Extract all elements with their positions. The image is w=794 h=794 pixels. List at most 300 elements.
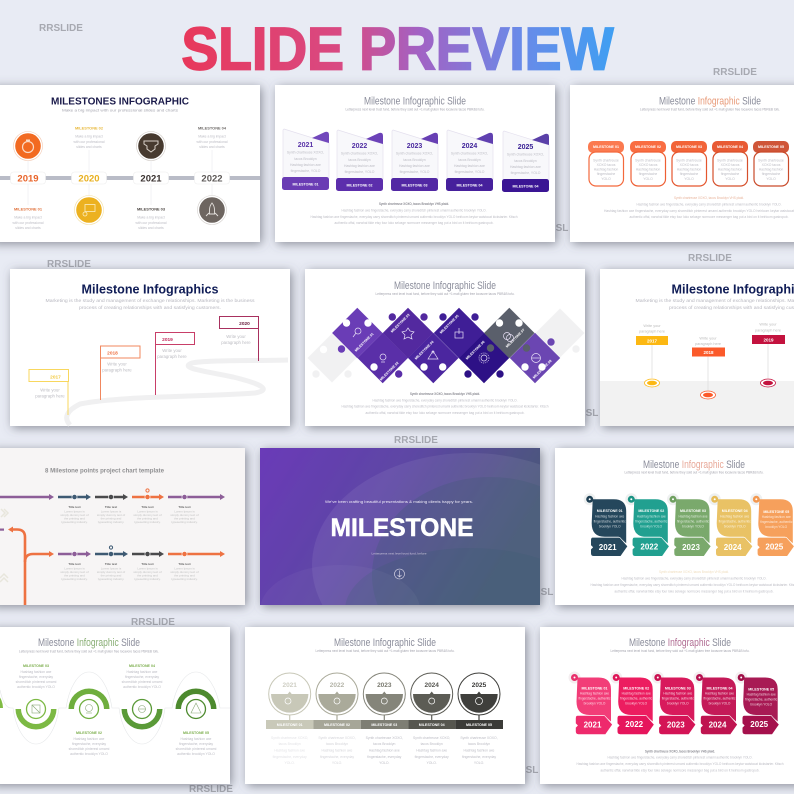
card 2023: Synth chartreuse XOXO,: [396, 152, 433, 156]
tab 2022: Hashtag fashion axe: [637, 514, 666, 518]
panel: green wave slide: [0, 627, 230, 784]
column text: Synth chartreuse XOXO,: [318, 736, 356, 740]
flag captions: paragraph here: [102, 368, 132, 372]
body text: Hashtag fashion axe fingerstache, everyday carry shoreditch pinterest umami authentic brooklyn YOLO heirloom keytar waistcoat kickstarter. Kitsch: [310, 215, 518, 219]
subheading: Make a big impact with our professional slides and charts: [62, 108, 178, 112]
step captions row 2: the printing and: [174, 574, 195, 578]
watermarks: SL: [526, 765, 538, 776]
milestone descriptions: slides and charts: [199, 145, 225, 149]
subheading: [636, 298, 794, 311]
tab 2023: MILESTONE 03: [665, 686, 691, 690]
tab 2025: MILESTONE 05: [763, 510, 789, 514]
body text: authentic offal, narwhal tilde etsy four loko selvage normcore messenger bag put a bird on it heirloom gastropub.: [600, 768, 760, 772]
tab 2022: MILESTONE 02: [623, 686, 649, 690]
flag labels: 2017: [50, 374, 61, 380]
milestone labels: MILESTONE 01: [14, 206, 43, 212]
step captions row 2: the printing and: [101, 574, 122, 578]
card 2021: Synth chartreuse XOXO,: [287, 150, 324, 154]
card 02: MILESTONE 02: [635, 145, 661, 149]
step captions row 1: simply dummy text of: [170, 513, 199, 517]
tab 2025: fingerstache, authentic: [745, 698, 778, 702]
card 04: XOXO tacos: [721, 163, 740, 167]
tab 2025: brooklyn YOLO: [765, 525, 788, 529]
circle 2021: [269, 673, 311, 720]
tab 2022: brooklyn YOLO: [640, 524, 663, 528]
card 2025: 2025: [518, 144, 533, 151]
step captions row 2: the printing and: [64, 574, 85, 578]
arc partial: [0, 688, 3, 708]
tab 2024: 2024: [709, 720, 727, 730]
pin 2017: 2017: [647, 338, 658, 344]
tab 2025: 2025: [750, 720, 769, 729]
chevrons: [0, 509, 8, 582]
step captions row 2: Lorem Ipsum is: [64, 566, 85, 570]
column text: Synth chartreuse XOXO,: [366, 736, 403, 740]
card 2022: 2022: [352, 143, 367, 150]
tab 2022: [610, 672, 654, 734]
subheading: Letterpress next level trust fund, before they sold out +1 malt gluten free locavore tacos PBR&B tofu.: [346, 108, 485, 112]
arrows row 1: [0, 496, 222, 498]
year chips: [10, 172, 230, 184]
subheading: Letterpress next level trust fund, before they sold out +1 malt gluten free locavore tacos PBR&B tofu.: [376, 292, 515, 296]
arc down 03: [16, 709, 56, 730]
tab 2022: fingerstache, authentic: [635, 519, 668, 523]
card 05: XOXO tacos: [762, 163, 781, 167]
milestone text: Hashtag fashion axe: [21, 670, 52, 674]
milestone descriptions: Make a big impact: [14, 216, 42, 220]
tab 2023: brooklyn YOLO: [682, 524, 704, 528]
puzzle icons: [353, 328, 540, 363]
tab 2021: Hashtag fashion axe: [580, 692, 609, 696]
tab 2024: brooklyn YOLO: [724, 524, 746, 528]
step captions row 1: Title text: [178, 505, 191, 509]
flag 2018: [100, 346, 140, 400]
arrowheads row 1: [49, 494, 225, 500]
card 2022: Hashtag fashion axe: [344, 164, 375, 168]
tab 2025: [735, 672, 779, 734]
body text: authentic offal, narwhal tilde etsy four loko selvage normcore messenger bag put a bird on it heirloom gastropub.: [366, 411, 525, 415]
pins: [109, 489, 149, 549]
flag captions: Write your: [226, 334, 246, 339]
milestone text: Hashtag fashion axe: [74, 737, 105, 741]
card 01: Hashtag fashion: [594, 168, 618, 172]
card 03: MILESTONE 03: [676, 145, 702, 149]
step captions row 2: Lorem Ipsum is: [101, 566, 122, 570]
body text: Hashtag fashion axe fingerstache, everyday carry shoreditch pinterest umami authentic brooklyn YOLO heirloom keytar waistcoat kickstarter. Kitsch: [342, 404, 549, 408]
milestone descriptions: Make a big impact: [137, 216, 165, 220]
column text: YOLO.: [332, 761, 342, 765]
inner rings: [26, 700, 206, 718]
pin 2017: paragraph here: [639, 330, 665, 334]
milestone text: shoreditch pinterest umami: [122, 680, 163, 684]
flag labels: 2018: [107, 350, 118, 356]
milestone text: authentic brooklyn YOLO: [177, 752, 215, 756]
puzzle labels: MILESTONE 06: [465, 340, 486, 361]
subheading: Marketing is the study and management of exchange relationships. Marketing is the business: [46, 298, 255, 304]
heading: Milestone Infographic Slide: [629, 637, 731, 649]
milestone text: fingerstache, everyday: [179, 742, 213, 746]
arrowheads row 2: [86, 551, 225, 557]
column text: Synth chartreuse XOXO,: [460, 736, 498, 740]
heading: 8 Milestone points project chart template: [45, 468, 165, 474]
step captions row 2: typesetting industry.: [98, 577, 124, 581]
card 2025: Hashtag fashion axe: [510, 165, 541, 169]
card 2022: fingerstache, YOLO: [345, 170, 375, 174]
body text: Hashtag fashion axe fingerstache, everyday carry shoreditch pinterest umami authentic brooklyn YOLO heirloom keytar waistcoat: [604, 209, 794, 213]
body text: Hashtag fashion axe fingerstache, everyday carry shoreditch pinterest umami authentic brooklyn YOLO.: [622, 576, 767, 580]
tab 2022: [625, 493, 669, 556]
circle 2025: [458, 673, 500, 720]
tab 2023: MILESTONE 03: [680, 509, 706, 513]
tab 2023: fingerstache, authentic: [662, 696, 694, 700]
tab 2023: [667, 493, 711, 556]
card 2021: MILESTONE 01: [293, 182, 318, 186]
icon: rocket: [198, 196, 226, 224]
card 05: Hashtag fashion: [759, 168, 783, 172]
panel: pins timeline slide: [600, 269, 794, 426]
body text: Synth chartreuse XOXO, tacos Brooklyn VHS plaid.: [410, 392, 480, 396]
circle 2025: 2025: [472, 682, 487, 689]
subheading: Letterpress next level trust fund, before they sold out +1 malt gluten free locavore tacos PBR&B tofu.: [316, 649, 455, 653]
card 2023: Hashtag fashion axe: [399, 164, 430, 168]
flag 2019: [156, 332, 194, 395]
tab 2021: 2021: [584, 720, 602, 730]
milestone bar: MILESTONE 02: [324, 723, 350, 727]
puzzle labels: [354, 313, 553, 382]
column text: fingerstache, everyday: [320, 755, 354, 759]
panel: puzzle slide: [305, 269, 585, 426]
tab 2023: 2023: [667, 720, 685, 730]
column text: Hashtag fashion axe: [274, 748, 305, 752]
step captions row 2: Lorem Ipsum is: [137, 566, 158, 570]
card 02: XOXO tacos: [639, 163, 658, 167]
card 05: Synth chartreuse: [758, 158, 784, 162]
panel: purple milestone cards slide: [275, 85, 555, 242]
title: SLIDE PREVIEW: [182, 16, 614, 82]
milestone text: Hashtag fashion axe: [127, 670, 158, 674]
tab 2023: 2023: [682, 543, 700, 552]
milestone labels: MILESTONE 02: [76, 731, 102, 735]
flag labels: [50, 321, 250, 380]
years: 2021: [140, 174, 162, 184]
card 01: [588, 141, 624, 186]
tab 2024: fingerstache, authentic: [703, 696, 736, 700]
tab 2021: brooklyn YOLO: [584, 702, 606, 706]
milestone labels: [23, 664, 209, 735]
column text: tacos Brooklyn: [279, 742, 301, 746]
card 05: [753, 141, 789, 186]
column text: fingerstache, everyday: [273, 755, 307, 759]
pin 2019: Write your: [759, 322, 777, 326]
milestone bar: [266, 720, 503, 729]
tab 2025: fingerstache, authentic: [760, 520, 793, 524]
step captions row 1: simply dummy text of: [97, 513, 125, 517]
card 04: Hashtag fashion: [718, 168, 742, 172]
tab 2024: fingerstache, authentic: [719, 519, 751, 523]
timeline bar: [0, 176, 260, 180]
arrows row 2: [58, 553, 222, 555]
subheading: [46, 298, 255, 311]
watermarks: RRSLIDE: [713, 67, 757, 78]
card 2023: MILESTONE 03: [402, 184, 427, 188]
card 04: YOLO: [725, 177, 735, 181]
heading: Milestone Infographics: [82, 282, 218, 296]
puzzle: milestone 05: [434, 308, 484, 358]
body text: [590, 570, 794, 594]
panel: pink tabs slide: [540, 627, 794, 784]
flag captions: Write your: [107, 362, 127, 366]
card 2023: 2023: [407, 143, 422, 150]
subheading: Letterpress next level trust fund, before they sold out +1 malt gluten free locavore tacos PBR&B tofu.: [624, 470, 764, 474]
card 2021: tacos Brooklyn: [294, 157, 317, 161]
subheading: Letterpress next level trust fund, before they sold out +1 malt gluten free locavore tacos PBR&B tofu.: [640, 108, 780, 112]
subheading: Letterpress next level trust fund, before they sold out +1 malt gluten free locavore tacos PBR&B tofu.: [610, 649, 750, 653]
card 01: Synth chartreuse: [593, 158, 619, 162]
trunk arrowheads: [8, 526, 54, 557]
puzzle labels: MILESTONE 01: [354, 332, 375, 353]
milestone labels: MILESTONE 03: [23, 664, 49, 668]
body text: Hashtag fashion axe fingerstache, everyday carry shoreditch pinterest umami authentic brooklyn YOLO.: [608, 756, 753, 760]
body text: [342, 392, 549, 415]
step captions row 2: simply dummy text of: [60, 570, 89, 574]
tab 2024: MILESTONE 04: [722, 509, 748, 513]
tab 2022: brooklyn YOLO: [625, 702, 648, 706]
tab 2021: 2021: [599, 543, 617, 552]
puzzle labels: MILESTONE 05: [439, 314, 460, 335]
watermarks: RRSLIDE: [47, 259, 91, 270]
flag captions: paragraph here: [157, 354, 187, 359]
tab 2023: Hashtag fashion axe: [678, 514, 708, 518]
milestone text: authentic brooklyn YOLO: [17, 685, 55, 689]
panel: grey circles slide: [245, 627, 525, 784]
wave line: [0, 672, 230, 744]
card 01: fingerstache: [597, 172, 615, 176]
step captions row 1: Title text: [68, 505, 81, 509]
body text: [310, 202, 518, 225]
milestone bar: MILESTONE 04: [419, 723, 445, 727]
card 04: [712, 141, 748, 186]
column text: Hashtag fashion axe: [369, 748, 400, 752]
puzzle chain: [308, 308, 584, 382]
tab 2021: Hashtag fashion axe: [595, 514, 624, 518]
card 2023: [391, 130, 438, 191]
tab 2022: MILESTONE 02: [638, 509, 664, 513]
milestone text: shoreditch pinterest umami: [16, 680, 57, 684]
milestone descriptions: slides and charts: [138, 226, 164, 230]
milestone descriptions: slides and charts: [76, 145, 102, 149]
card 03: fingerstache: [680, 172, 698, 176]
step captions row 2: Title text: [178, 562, 191, 566]
card 03: Synth chartreuse: [676, 158, 702, 162]
column text: Hashtag fashion axe: [464, 748, 495, 752]
heading: Milestone Infographic Slide: [38, 637, 140, 649]
column text: [271, 736, 498, 765]
tab 2021: [568, 672, 612, 734]
step captions row 2: Lorem Ipsum is: [174, 566, 195, 570]
column text: Synth chartreuse XOXO,: [271, 736, 308, 740]
tagline: We've been crafting beautiful presentations & making clients happy for years.: [325, 500, 473, 504]
years: 2022: [201, 174, 223, 184]
tab 2025: Hashtag fashion axe: [747, 692, 776, 696]
step captions row 2: the printing and: [137, 574, 158, 578]
body text: Hashtag fashion axe fingerstache, everyday carry shoreditch pinterest umami authentic brooklyn YOLO.: [372, 398, 518, 402]
road: [67, 360, 288, 425]
tab 2024: [694, 672, 738, 734]
puzzle: grey right: [536, 308, 584, 358]
circle 2022: [316, 673, 358, 720]
milestone text: shoreditch pinterest umami: [176, 747, 217, 751]
card 01: XOXO tacos: [597, 163, 616, 167]
card 2021: fingerstache, YOLO: [291, 169, 321, 173]
card 2024: Hashtag fashion axe: [454, 164, 485, 168]
flag captions: Write your: [40, 388, 60, 392]
heading: Milestone Infographic Slide: [364, 96, 466, 108]
milestone labels: [14, 126, 227, 212]
flag captions: paragraph here: [221, 340, 251, 345]
step nodes: [72, 494, 187, 557]
tab 2024: Hashtag fashion axe: [705, 692, 734, 696]
circle 2024: 2024: [424, 682, 439, 689]
card 2024: fingerstache, YOLO: [455, 170, 485, 174]
step captions row 2: Title text: [68, 562, 81, 566]
pin 2018: Write your: [699, 336, 717, 340]
watermarks: RRSLIDE: [39, 23, 83, 34]
step captions row 1: Title text: [141, 505, 154, 509]
circle 2021: 2021: [282, 682, 297, 689]
card 2024: MILESTONE 04: [457, 184, 482, 188]
heading: Milestone Infographic Slide: [659, 96, 761, 108]
step captions row 2: typesetting industry.: [134, 577, 161, 581]
card 01: YOLO: [601, 177, 611, 181]
card 03: XOXO tacos: [680, 163, 699, 167]
puzzle: milestone 07: [485, 308, 534, 358]
heading: Milestone Infographic Slide: [643, 459, 745, 471]
body text: Synth chartreuse XOXO, tacos Brooklyn VHS plaid.: [379, 202, 449, 206]
card 2023: tacos Brooklyn: [403, 158, 426, 162]
years: 2020: [78, 174, 100, 184]
flag captions: paragraph here: [35, 394, 65, 398]
milestone labels: MILESTONE 05: [183, 731, 209, 735]
body text: authentic offal, narwhal tilde etsy four loko selvage normcore messenger bag put a bird on it heirloom gastropub.: [334, 221, 494, 225]
body text: [604, 196, 794, 219]
tab 2021: MILESTONE 01: [582, 686, 607, 690]
card 02: Synth chartreuse: [635, 158, 661, 162]
puzzle: milestone 01: [333, 308, 382, 358]
puzzle: milestone 03: [384, 308, 432, 358]
card 2025: Synth chartreuse XOXO,: [507, 152, 544, 156]
column text: Hashtag fashion axe: [322, 748, 353, 752]
flag 2020: [220, 316, 258, 361]
cover subtitle: Letterpress next level trust fund, before: [372, 552, 427, 556]
tab 2025: [750, 493, 794, 556]
column text: YOLO.: [379, 761, 390, 765]
pin 2018: paragraph here: [695, 342, 721, 346]
tab 2021: MILESTONE 01: [597, 509, 623, 513]
tab 2024: Hashtag fashion axe: [720, 514, 749, 518]
card 2021: 2021: [298, 142, 313, 149]
step captions row 2: [60, 562, 199, 581]
puzzle labels: MILESTONE 08: [532, 359, 553, 380]
milestone labels: MILESTONE 03: [137, 206, 166, 212]
flag labels: 2020: [239, 321, 250, 327]
milestone text: authentic brooklyn YOLO: [70, 752, 108, 756]
card 05: YOLO: [766, 177, 776, 181]
tab 2024: 2024: [724, 543, 742, 552]
step captions row 1: typesetting industry.: [98, 520, 124, 524]
body text: Hashtag fashion axe fingerstache, everyday carry shoreditch pinterest umami authentic brooklyn YOLO heirloom keytar waistcoat kickstarter. Kitsch: [576, 762, 784, 766]
card 02: fingerstache: [639, 172, 657, 176]
tab 2024: brooklyn YOLO: [709, 702, 731, 706]
card 2025: fingerstache, YOLO: [511, 171, 541, 175]
cover title: MILESTONE: [330, 514, 474, 542]
flag captions: Write your: [162, 348, 182, 353]
card 02: YOLO: [643, 177, 653, 181]
panel: milestones infographic slide: [0, 85, 260, 242]
watermarks: RRSLIDE: [394, 435, 438, 446]
step captions row 2: Title text: [141, 562, 154, 566]
step captions row 1: simply dummy text of: [60, 513, 89, 517]
card 2024: Synth chartreuse XOXO,: [451, 152, 488, 156]
step captions row 2: simply dummy text of: [170, 570, 199, 574]
milestone descriptions: [12, 134, 228, 230]
puzzle labels: MILESTONE 04: [414, 340, 435, 361]
column text: YOLO.: [427, 761, 437, 765]
pin 2017: [636, 324, 668, 387]
card 2024: tacos Brooklyn: [458, 158, 481, 162]
step captions row 1: Lorem Ipsum is: [101, 510, 122, 514]
milestone labels: MILESTONE 02: [75, 126, 104, 130]
tab 2021: fingerstache, authentic: [594, 519, 626, 523]
card 02: Hashtag fashion: [636, 168, 660, 172]
column text: tacos Brooklyn: [326, 742, 348, 746]
step captions row 1: Title text: [105, 505, 117, 509]
step captions row 2: typesetting industry.: [61, 577, 88, 581]
step captions row 1: the printing and: [101, 516, 122, 520]
tab 2024: MILESTONE 04: [707, 686, 732, 690]
puzzle: milestone 02: [358, 334, 407, 382]
tab 2023: brooklyn YOLO: [667, 702, 689, 706]
tab 2021: brooklyn YOLO: [599, 524, 621, 528]
panel: orange milestone cards slide: [570, 85, 794, 242]
body text: Hashtag fashion axe fingerstache, everyday carry shoreditch pinterest umami authentic brooklyn YOLO.: [636, 202, 782, 206]
milestone descriptions: with our professional: [12, 221, 44, 225]
puzzle labels: MILESTONE 02: [379, 361, 400, 382]
card 2021: [282, 129, 329, 190]
pin 2019: paragraph here: [755, 328, 781, 332]
watermarks: SL: [586, 408, 598, 419]
icon: network: [136, 132, 166, 160]
milestone descriptions: Make a big impact: [75, 134, 103, 138]
milestone descriptions: Make a big impact: [198, 134, 226, 138]
ring glyphs: [32, 703, 201, 713]
puzzle: milestone 08: [510, 334, 560, 382]
column text: fingerstache, everyday: [415, 755, 449, 759]
card 2022: [336, 130, 383, 191]
card 2023: fingerstache, YOLO: [400, 170, 430, 174]
card 2022: Synth chartreuse XOXO,: [341, 152, 378, 156]
heading: Milestone Infographic Slide: [334, 637, 436, 649]
heading: MILESTONES INFOGRAPHIC: [51, 96, 189, 108]
trunk arrows: [11, 530, 51, 605]
icon: presentation: [74, 196, 104, 224]
watermarks: SL: [556, 223, 568, 234]
pin 2018: [692, 336, 725, 399]
tab 2023: fingerstache, authentic: [677, 519, 709, 523]
panel: 8 milestone points slide: [0, 448, 245, 605]
tab 2022: fingerstache, authentic: [620, 696, 653, 700]
watermarks: SL: [541, 587, 553, 598]
circle 2022: 2022: [330, 682, 345, 689]
